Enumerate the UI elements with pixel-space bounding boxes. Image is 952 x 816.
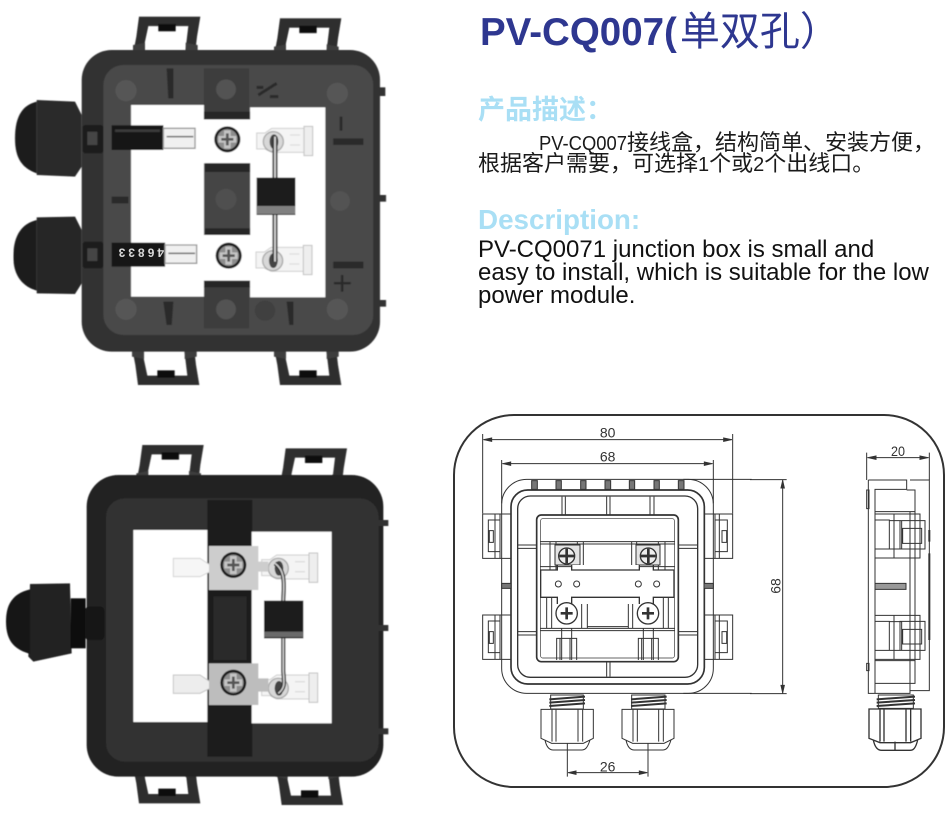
- technical drawing: side view: [750, 443, 929, 750]
- terminals: [257, 126, 313, 156]
- cable print: 46833: [116, 246, 164, 260]
- dimension: height 68: [750, 480, 787, 694]
- screws: [214, 126, 242, 269]
- windows: [131, 105, 325, 297]
- mounting clips: [132, 17, 341, 385]
- heading: product description in Chinese: 产品描述：: [478, 95, 613, 125]
- dimension: width 80: [483, 425, 733, 513]
- centre block: [205, 163, 250, 235]
- photo: junction box with one cable gland: [6, 445, 388, 805]
- photo: junction box with two cable glands: [13, 17, 386, 385]
- cable glands: [541, 695, 674, 750]
- dimension: depth 20: 20: [891, 443, 905, 459]
- dimension: width 80: 80: [600, 425, 616, 441]
- terminals: [173, 553, 318, 702]
- terminal block: [540, 542, 675, 660]
- diode: [257, 137, 295, 262]
- polarity marks: [334, 117, 351, 292]
- panel: dimension drawing frame: [454, 415, 944, 787]
- text block: Chinese description: 接线盒，结构简单、安装方便，: [627, 130, 935, 155]
- technical drawing: front view: [483, 425, 752, 777]
- gland: [6, 583, 104, 662]
- side clips: [483, 514, 733, 659]
- box body: [87, 475, 388, 777]
- dimension: height 68: 68: [768, 578, 784, 594]
- box outline: [502, 479, 752, 693]
- dimension: depth 20: [867, 443, 929, 480]
- dimension: gland spacing 26: [567, 743, 648, 777]
- dimension: width 68: 68: [600, 449, 616, 465]
- box body: [82, 50, 386, 352]
- text block: English description: power module.: [478, 282, 635, 309]
- cable gland: [869, 695, 921, 750]
- text block: Chinese description: 1个或2个出线口。: [698, 151, 874, 176]
- diode: [264, 563, 303, 693]
- text block: English description: PV-CQ0071 junction box is small and: [478, 236, 874, 263]
- lower gland: [13, 217, 197, 294]
- dimension: width 68: [502, 449, 713, 503]
- text block: Chinese description: PV-CQ007: [539, 133, 627, 155]
- title: PV-CQ007(单双孔）: [480, 10, 840, 54]
- side profile: [867, 480, 929, 693]
- text block: Chinese description: 根据客户需要，可选择: [478, 151, 698, 176]
- heading: description in English: Description:: [478, 204, 640, 235]
- text block: English description: easy to install, which is suitable for the low: [478, 259, 930, 286]
- screws: [220, 552, 246, 696]
- upper gland: [15, 100, 195, 177]
- metal plates: [209, 546, 268, 705]
- mounting clips: [133, 445, 347, 805]
- windows: [133, 530, 332, 723]
- dimension: gland spacing 26: 26: [600, 758, 616, 774]
